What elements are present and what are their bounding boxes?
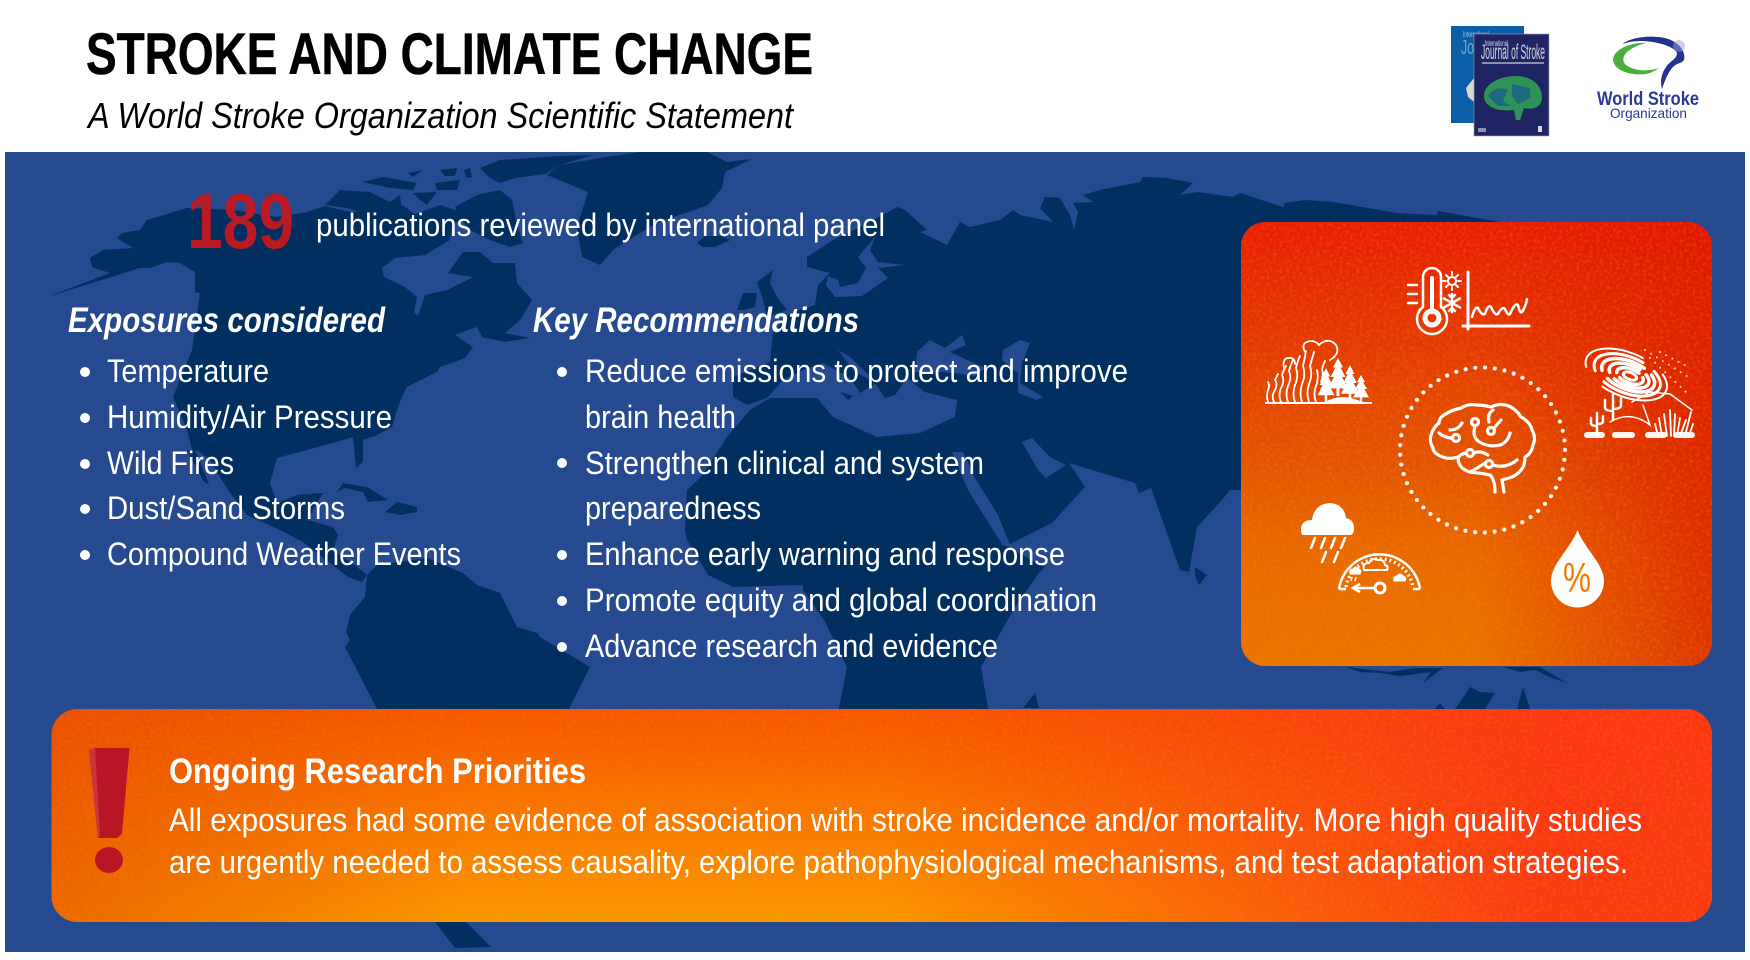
map: Madagascar <box>1023 693 1039 708</box>
icon: humidity droplet <box>1551 530 1604 608</box>
icon: humidity droplet: % <box>1563 554 1591 601</box>
icon: dust storm cyclone over desert <box>1578 338 1693 436</box>
icon: wildfire and trees <box>1265 341 1372 404</box>
recommendations bullet list: Promote equity and global coordination <box>585 582 1097 618</box>
icon: rain cloud and barometer <box>1301 503 1420 593</box>
panel: ongoing research priorities <box>51 709 1713 922</box>
infographic canvas: Journal of Stroke <box>1481 41 1545 64</box>
icon: brain in dotted circle <box>1400 368 1565 532</box>
map: British Isles <box>737 270 787 317</box>
recommendations bullet list: preparedness <box>585 490 761 526</box>
recommendations bullet list <box>557 353 1128 664</box>
sea: Red Sea <box>952 452 1010 546</box>
icon: thermometer with chart <box>1408 268 1529 334</box>
sea: Persian Gulf <box>1022 438 1066 478</box>
journal covers: International <box>1463 30 1489 39</box>
header subtitle: A World Stroke Organization Scientific Statement <box>86 95 795 136</box>
recommendations bullet list: brain health <box>585 399 736 435</box>
column: key recommendations <box>533 301 1128 664</box>
map: Arctic islands <box>325 155 593 247</box>
map: Greenland <box>547 152 752 265</box>
World Stroke Organization logo: World Stroke <box>1597 89 1699 110</box>
research priorities body text: All exposures had some evidence of association with stroke incidence and/or mortality. More high quality studies <box>169 802 1642 838</box>
map: Southeast Asia and Australia fragments <box>1345 667 1567 709</box>
world map <box>47 152 1600 948</box>
map: Sri Lanka <box>1195 567 1207 585</box>
research priorities body text <box>169 802 1642 880</box>
map: North and Central America <box>47 205 532 582</box>
map: Iceland <box>697 236 730 247</box>
count: 189 publications: 189 <box>187 177 294 265</box>
recommendations bullet list: Advance research and evidence <box>585 628 998 664</box>
map: Africa <box>685 398 1045 709</box>
panel: climate exposures icons card <box>1241 222 1712 666</box>
World Stroke Organization logo: Organization <box>1610 105 1687 121</box>
exposures bullet list: Temperature <box>107 353 269 389</box>
exposures bullet list: Humidity/Air Pressure <box>107 399 392 435</box>
research priorities body text: are urgently needed to assess causality, explore pathophysiological mechanisms, and test adaptation strategies. <box>169 844 1628 880</box>
World Stroke Organization logo <box>1597 37 1699 121</box>
map: Sicily <box>840 392 853 400</box>
recommendations bullet list: Enhance early warning and response <box>585 536 1065 572</box>
icon: exclamation mark <box>89 748 130 873</box>
exposures bullet list: Compound Weather Events <box>107 536 461 572</box>
recommendations heading: Key Recommendations <box>533 301 859 340</box>
journal covers <box>1451 26 1549 136</box>
map: South America <box>345 558 590 948</box>
sea: Caspian <box>1002 340 1043 400</box>
publications caption: publications reviewed by international panel <box>316 207 885 243</box>
journal covers: Jo <box>1461 37 1474 59</box>
journal covers: International <box>1485 39 1508 48</box>
map: Caribbean islands <box>337 483 417 515</box>
recommendations bullet list: Reduce emissions to protect and improve <box>585 353 1128 389</box>
exposures bullet list: Dust/Sand Storms <box>107 490 345 526</box>
recommendations bullet list: Strengthen clinical and system <box>585 445 984 481</box>
column: exposures considered <box>68 301 461 572</box>
header title: STROKE AND CLIMATE CHANGE <box>86 22 813 87</box>
inland seas on map <box>826 237 1066 546</box>
map: Baja California <box>187 450 209 484</box>
map: Eurasia <box>733 177 1500 572</box>
sea: Black Sea <box>915 335 985 376</box>
sea: Baltic <box>826 237 905 297</box>
exposures bullet list: Wild Fires <box>107 445 234 481</box>
exposures bullet list <box>80 353 461 572</box>
research priorities heading: Ongoing Research Priorities <box>169 752 586 791</box>
exposures heading: Exposures considered <box>68 301 386 340</box>
